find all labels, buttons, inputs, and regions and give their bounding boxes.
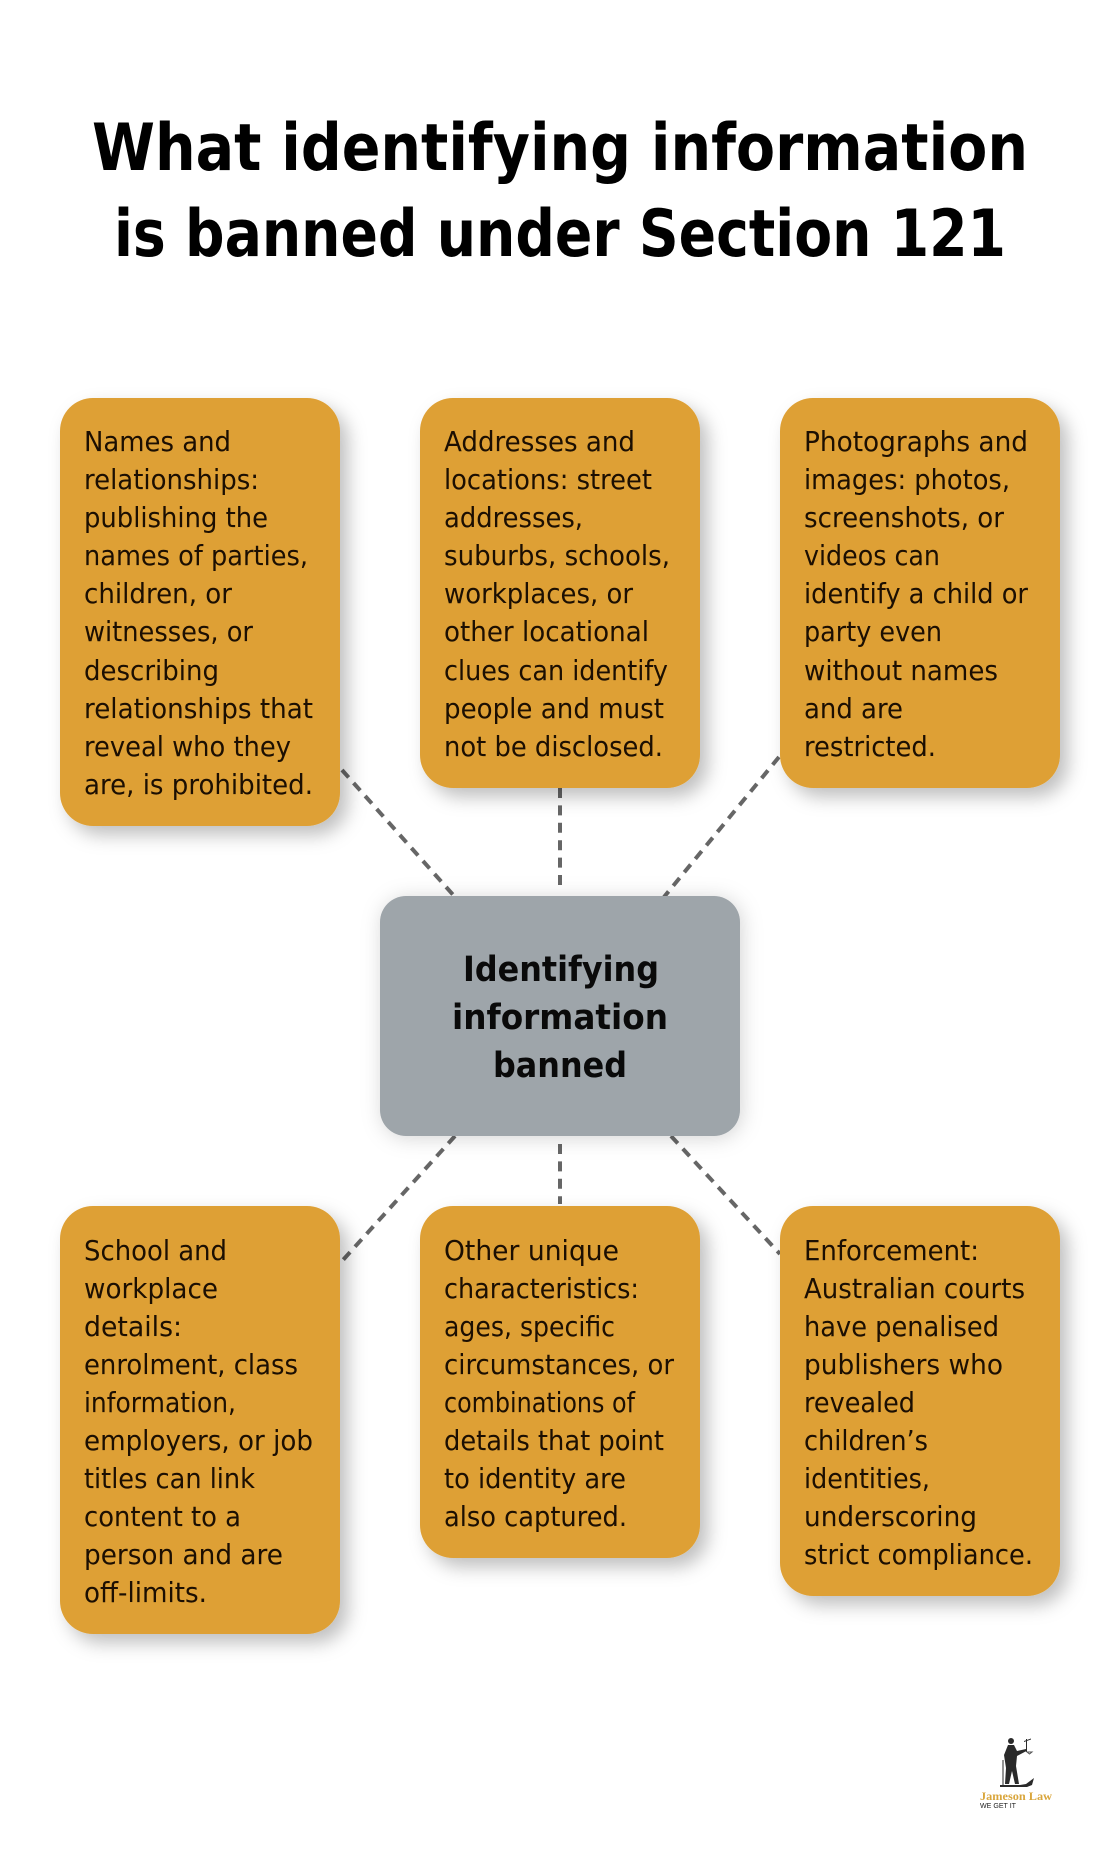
panel: photographs and images: Photographs and	[804, 426, 1028, 458]
panel: names and relationships: describing	[84, 655, 219, 687]
logo: Jameson Law: Jameson Law	[980, 1789, 1052, 1803]
panel: names and relationships: children, or	[84, 578, 233, 610]
panel: names and relationships: names of parties,	[84, 540, 308, 572]
panel: enforcement	[780, 1206, 1060, 1596]
panel: other unique characteristics: ages, specific	[444, 1311, 615, 1343]
panel: names and relationships: relationships:	[84, 464, 259, 496]
panel: enforcement: Australian courts	[804, 1273, 1025, 1305]
panel: enforcement: children’s	[804, 1425, 928, 1457]
panel: school and workplace details: content to a	[84, 1501, 241, 1533]
panel: addresses and locations: suburbs, schools,	[444, 540, 670, 572]
panel: names and relationships: are, is prohibited.	[84, 769, 313, 801]
panel: enforcement: Enforcement:	[804, 1235, 979, 1267]
panel: other unique characteristics: Other unique	[444, 1235, 619, 1267]
panel: photographs and images: identify a child or	[804, 578, 1029, 610]
panel: school and workplace details: employers, or job	[84, 1425, 313, 1457]
panel: enforcement: underscoring	[804, 1501, 977, 1533]
panel: school and workplace details: enrolment, class	[84, 1349, 298, 1381]
panel: photographs and images: images: photos,	[804, 464, 1010, 496]
panel: school and workplace details: person and are	[84, 1539, 283, 1571]
panel: other unique characteristics: combinations of	[444, 1387, 636, 1419]
panel: names and relationships: publishing the	[84, 502, 268, 534]
panel: addresses and locations: Addresses and	[444, 426, 635, 458]
logo: Jameson Law: WE GET IT	[980, 1803, 1017, 1810]
panel: other unique characteristics: also captured.	[444, 1501, 627, 1533]
panel: school and workplace details: titles can link	[84, 1463, 255, 1495]
panel: central topic: Identifying	[463, 950, 659, 990]
panel: photographs and images: screenshots, or	[804, 502, 1005, 534]
panel: school and workplace details: off-limits.	[84, 1577, 207, 1609]
panel: photographs and images: videos can	[804, 540, 940, 572]
panel: school and workplace details: workplace	[84, 1273, 218, 1305]
panel: other unique characteristics: to identity are	[444, 1463, 626, 1495]
panel: other unique characteristics	[420, 1206, 700, 1558]
panel: other unique characteristics: details that point	[444, 1425, 664, 1457]
panel: addresses and locations: other locational	[444, 616, 649, 648]
panel: photographs and images: restricted.	[804, 731, 936, 763]
panel: addresses and locations: locations: street	[444, 464, 652, 496]
panel: central topic: information	[452, 998, 668, 1038]
panel: names and relationships	[60, 398, 340, 826]
title	[92, 111, 1028, 272]
panel: central topic: banned	[493, 1046, 627, 1086]
panel: enforcement: have penalised	[804, 1311, 999, 1343]
panel: other unique characteristics: circumstances, or	[444, 1349, 675, 1381]
panel: addresses and locations	[420, 398, 700, 788]
connector lines	[342, 757, 780, 1260]
panel: school and workplace details	[60, 1206, 340, 1634]
panel: names and relationships: relationships that	[84, 693, 313, 725]
panel: photographs and images: without names	[804, 655, 998, 687]
panel: school and workplace details: information,	[84, 1387, 236, 1419]
panel: addresses and locations: not be disclosed.	[444, 731, 663, 763]
panel: central topic	[380, 896, 740, 1136]
panel: names and relationships: Names and	[84, 426, 231, 458]
panel: enforcement: strict compliance.	[804, 1539, 1033, 1571]
panel: photographs and images: and are	[804, 693, 903, 725]
panel: school and workplace details: details:	[84, 1311, 182, 1343]
panel: school and workplace details: School and	[84, 1235, 227, 1267]
panel: addresses and locations: clues can identify	[444, 655, 668, 687]
panel: addresses and locations: people and must	[444, 693, 664, 725]
panel: names and relationships: reveal who they	[84, 731, 291, 763]
panel: addresses and locations: workplaces, or	[444, 578, 634, 610]
logo: Jameson Law	[980, 1738, 1052, 1810]
panel: photographs and images: party even	[804, 616, 942, 648]
panel: addresses and locations: addresses,	[444, 502, 583, 534]
panel: photographs and images	[780, 398, 1060, 788]
panel: enforcement: publishers who	[804, 1349, 1003, 1381]
panel: enforcement: revealed	[804, 1387, 915, 1419]
panel: other unique characteristics: characteristics:	[444, 1273, 639, 1305]
panel: enforcement: identities,	[804, 1463, 930, 1495]
icon: lady justice	[1000, 1738, 1034, 1787]
panel: names and relationships: witnesses, or	[84, 616, 254, 648]
